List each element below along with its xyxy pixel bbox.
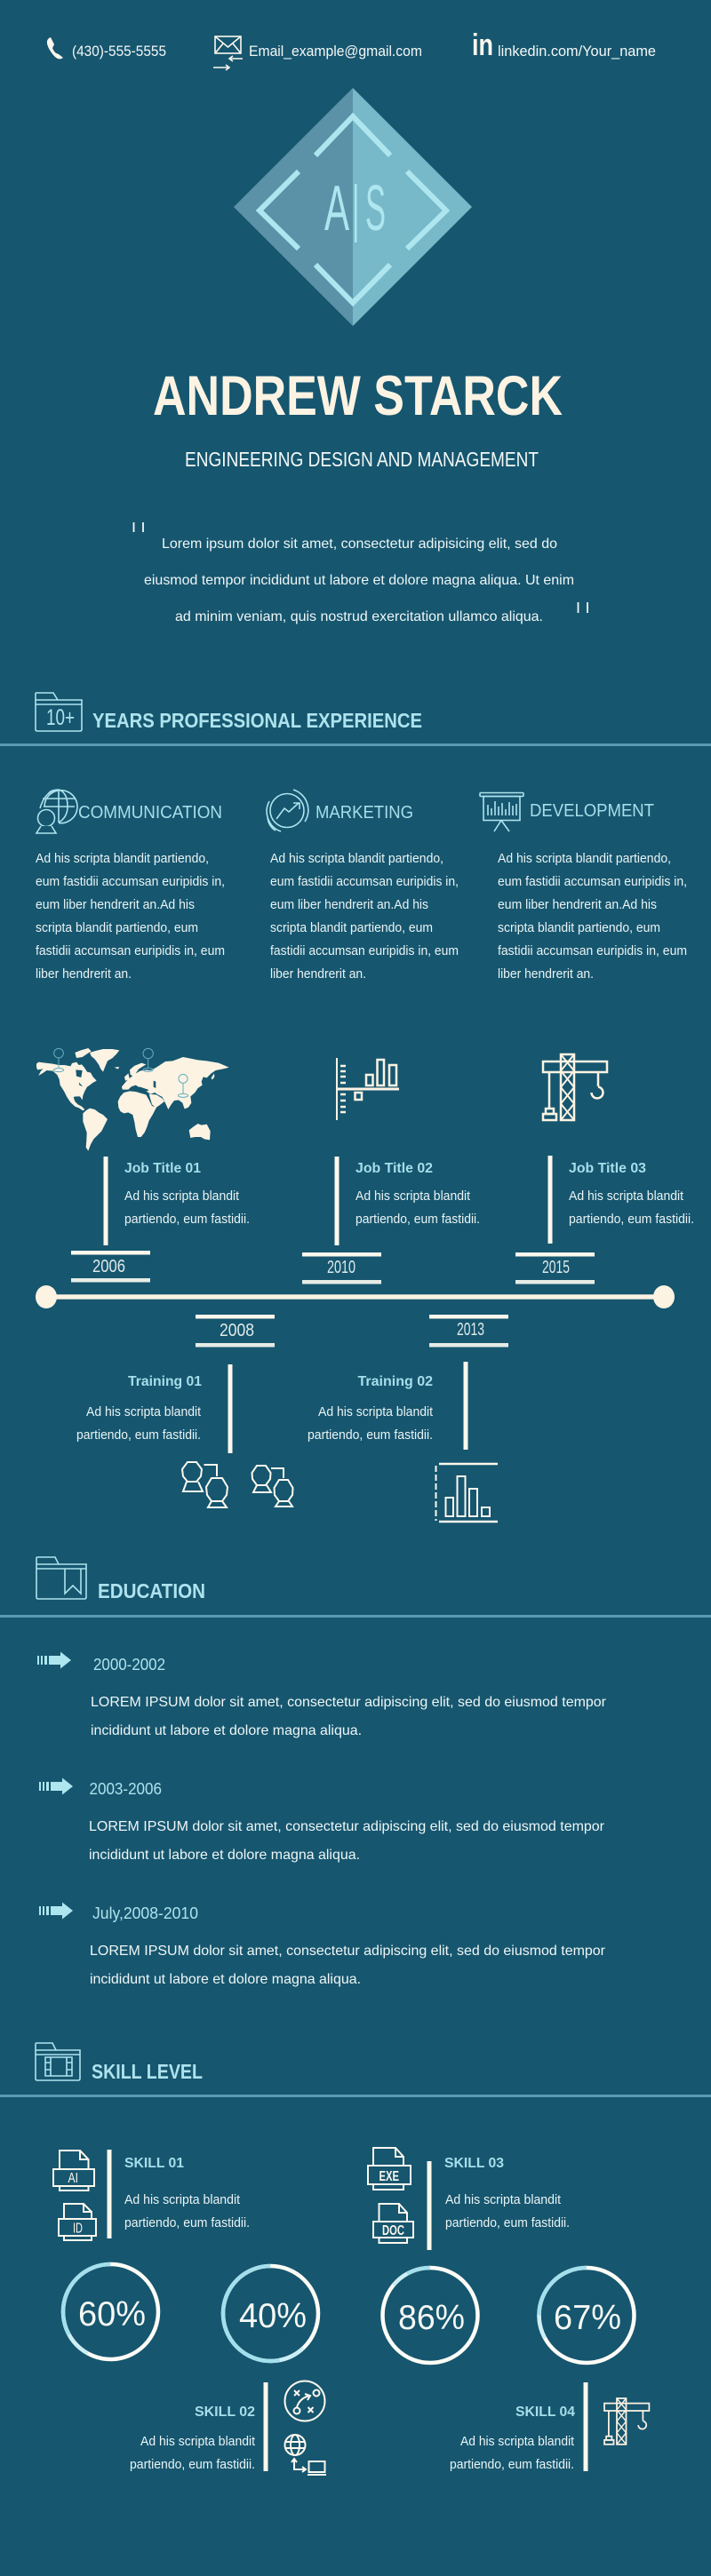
skill description	[130, 2434, 256, 2472]
description: scripta blandit partiendo, eum	[498, 920, 660, 935]
timeline year: 2013	[429, 1315, 508, 1347]
dates: July,2008-2010	[92, 1904, 198, 1922]
description: fastidii accumsan euripidis in, eum	[498, 943, 687, 958]
logo: diamond monogram: S	[365, 173, 386, 244]
progress ring: 40%	[223, 2266, 318, 2361]
skill description: Ad his scripta blandit	[124, 2192, 241, 2207]
icon: bookmark folder	[36, 1557, 86, 1599]
job description	[356, 1189, 480, 1227]
job description	[124, 1189, 250, 1227]
section heading: experience	[36, 693, 422, 732]
job title: Job Title 01	[124, 1161, 201, 1176]
training description	[76, 1404, 202, 1443]
description	[36, 851, 225, 982]
heading: MARKETING	[316, 803, 413, 823]
icon: opening quote	[133, 522, 143, 532]
logo: diamond monogram: A	[324, 173, 349, 244]
description: LOREM IPSUM dolor sit amet, consectetur adipiscing elit, sed do eiusmod tempor	[89, 1819, 605, 1834]
quote text: Lorem ipsum dolor sit amet, consectetur adipisicing elit, sed do	[162, 537, 557, 552]
panel: skill 03	[368, 2148, 570, 2250]
icon: ID file	[59, 2204, 96, 2240]
icon: DOC file	[373, 2204, 413, 2243]
icon: linkedin: in	[472, 28, 493, 62]
icon: folder 10+	[36, 693, 82, 731]
description: LOREM IPSUM dolor sit amet, consectetur adipiscing elit, sed do eiusmod tempor	[91, 1695, 607, 1710]
description: incididunt ut labore et dolore magna aliqua.	[91, 1723, 362, 1738]
description: eum fastidii accumsan euripidis in,	[270, 874, 459, 889]
skill description: Ad his scripta blandit	[460, 2434, 575, 2449]
heading: DEVELOPMENT	[530, 801, 654, 821]
icon: globe and person	[36, 790, 77, 833]
job title: Job Title 02	[356, 1161, 433, 1176]
skill description: partiendo, eum fastidii.	[445, 2215, 570, 2230]
job description: partiendo, eum fastidii.	[356, 1212, 480, 1227]
progress ring: 67%	[539, 2268, 635, 2363]
skill description	[124, 2192, 250, 2230]
timeline year: 2013: 2013	[457, 1320, 484, 1340]
description	[90, 1944, 606, 1987]
progress ring: 86%	[382, 2268, 478, 2363]
icon: laptop link	[292, 2459, 326, 2475]
icon: tactics circle	[284, 2381, 325, 2421]
skill description: Ad his scripta blandit	[140, 2434, 256, 2449]
panel: education entry 1	[37, 1652, 607, 1738]
icon: crane small	[604, 2398, 649, 2445]
timeline year: 2010: 2010	[327, 1258, 356, 1277]
quote text: eiusmod tempor incididunt ut labore et dolore magna aliqua. Ut enim	[144, 573, 574, 588]
icon: EXE file	[368, 2148, 411, 2190]
description: liber hendrerit an.	[36, 966, 132, 982]
section heading: education	[36, 1557, 205, 1602]
progress ring: 67%: 67%	[554, 2299, 621, 2337]
skill title: SKILL 02	[195, 2405, 255, 2420]
timeline year: 2015: 2015	[542, 1258, 570, 1277]
description: liber hendrerit an.	[498, 966, 594, 982]
panel: skill 04	[450, 2382, 649, 2472]
training title: Training 02	[357, 1374, 433, 1389]
icon: DOC file: DOC	[382, 2223, 404, 2238]
logo: diamond monogram	[234, 88, 472, 326]
timeline year: 2008	[196, 1315, 275, 1347]
icon: people pair two	[252, 1466, 293, 1507]
job description: partiendo, eum fastidii.	[124, 1212, 250, 1227]
description: incididunt ut labore et dolore magna aliqua.	[90, 1972, 361, 1987]
icon: arrow	[39, 1903, 73, 1919]
description	[270, 851, 459, 982]
description: fastidii accumsan euripidis in, eum	[270, 943, 459, 958]
timeline year: 2006	[71, 1251, 150, 1283]
icon: people pair one	[182, 1462, 228, 1507]
skill description	[445, 2192, 570, 2230]
skill title: SKILL 04	[515, 2405, 575, 2420]
panel: marketing	[267, 790, 459, 982]
job description: partiendo, eum fastidii.	[569, 1212, 694, 1227]
quote text: ad minim veniam, quis nostrud exercitation ullamco aliqua.	[175, 609, 543, 624]
job description: Ad his scripta blandit	[124, 1189, 240, 1204]
training description: Ad his scripta blandit	[86, 1404, 202, 1419]
dates: 2003-2006	[89, 1780, 162, 1798]
icon: email	[213, 36, 243, 70]
progress ring: 86%: 86%	[398, 2299, 465, 2337]
panel: communication	[36, 790, 225, 982]
icon: presentation board	[480, 792, 523, 831]
email address: Email_example@gmail.com	[249, 43, 422, 60]
job description	[569, 1189, 694, 1227]
panel: education entry 2	[39, 1778, 605, 1863]
skill title: SKILL 03	[444, 2156, 504, 2171]
icon: dashed bar chart	[435, 1464, 498, 1522]
icon: arrow	[39, 1778, 73, 1794]
skill description: partiendo, eum fastidii.	[130, 2457, 255, 2472]
quote text	[144, 537, 574, 624]
description: eum liber hendrerit an.Ad his	[498, 897, 657, 912]
description: scripta blandit partiendo, eum	[36, 920, 198, 935]
description	[91, 1695, 607, 1738]
description: scripta blandit partiendo, eum	[270, 920, 433, 935]
icon: bar chart	[337, 1058, 399, 1120]
panel: skill 01	[53, 2150, 250, 2240]
description: eum liber hendrerit an.Ad his	[270, 897, 428, 912]
skill description: partiendo, eum fastidii.	[450, 2457, 574, 2472]
job description: Ad his scripta blandit	[569, 1189, 684, 1204]
timeline axis	[36, 1285, 675, 1308]
description: incididunt ut labore et dolore magna aliqua.	[89, 1848, 360, 1863]
panel: job 01	[103, 1157, 250, 1245]
timeline year: 2006: 2006	[92, 1257, 125, 1276]
description: eum liber hendrerit an.Ad his	[36, 897, 195, 912]
timeline year: 2010	[302, 1252, 381, 1284]
heading text: EDUCATION	[98, 1579, 205, 1602]
description: Ad his scripta blandit partiendo,	[36, 851, 209, 866]
panel: education entry 3	[39, 1903, 606, 1987]
section heading: skill level	[36, 2043, 203, 2083]
panel: contact header	[47, 28, 656, 70]
panel: skill 02	[130, 2381, 326, 2475]
panel: training 01	[76, 1364, 233, 1453]
icon: crane	[543, 1054, 607, 1120]
description: Ad his scripta blandit partiendo,	[498, 851, 671, 866]
panel: development	[480, 792, 687, 982]
description	[89, 1819, 605, 1863]
icon: phone	[47, 37, 63, 59]
icon: globe	[284, 2435, 306, 2455]
description: Ad his scripta blandit partiendo,	[270, 851, 443, 866]
progress ring: 40%: 40%	[239, 2297, 307, 2335]
description: eum fastidii accumsan euripidis in,	[498, 874, 687, 889]
dates: 2000-2002	[93, 1656, 165, 1674]
description: liber hendrerit an.	[270, 966, 366, 982]
progress ring: 60%: 60%	[78, 2295, 146, 2334]
skill description: Ad his scripta blandit	[445, 2192, 562, 2207]
phone number: (430)-555-5555	[72, 43, 166, 60]
icon: film folder	[36, 2043, 80, 2080]
skill description	[450, 2434, 575, 2472]
heading text: SKILL LEVEL	[92, 2060, 203, 2083]
job title: Job Title 03	[569, 1161, 646, 1176]
icon: arrow	[37, 1652, 71, 1668]
training description: partiendo, eum fastidii.	[308, 1427, 433, 1443]
icon: folder 10+: 10+	[46, 705, 75, 730]
training description	[308, 1404, 434, 1443]
linkedin address: linkedin.com/Your_name	[498, 43, 656, 60]
job description: Ad his scripta blandit	[356, 1189, 471, 1204]
quote block	[133, 522, 587, 624]
title: name: ANDREW STARCK	[153, 365, 563, 427]
heading text: YEARS PROFESSIONAL EXPERIENCE	[92, 709, 422, 732]
description: eum fastidii accumsan euripidis in,	[36, 874, 225, 889]
progress ring: 60%	[63, 2264, 158, 2359]
timeline year: 2015	[515, 1252, 595, 1284]
description	[498, 851, 687, 982]
training description: Ad his scripta blandit	[318, 1404, 434, 1419]
timeline year: 2008: 2008	[220, 1321, 254, 1340]
panel: job 02	[334, 1157, 480, 1245]
description: LOREM IPSUM dolor sit amet, consectetur adipiscing elit, sed do eiusmod tempor	[90, 1944, 606, 1959]
skill description: partiendo, eum fastidii.	[124, 2215, 250, 2230]
training description: partiendo, eum fastidii.	[76, 1427, 201, 1443]
panel: job 03	[547, 1156, 694, 1244]
skill title: SKILL 01	[124, 2156, 184, 2171]
icon: closing quote	[578, 602, 587, 613]
icon: AI file	[53, 2151, 94, 2190]
icon: ID file: ID	[73, 2221, 83, 2237]
description: fastidii accumsan euripidis in, eum	[36, 943, 225, 958]
icon: growth arrow circle	[267, 790, 308, 831]
training title: Training 01	[128, 1374, 202, 1389]
icon: AI file: AI	[68, 2171, 78, 2186]
icon: EXE file: EXE	[379, 2169, 399, 2184]
subtitle: ENGINEERING DESIGN AND MANAGEMENT	[185, 448, 539, 471]
heading: COMMUNICATION	[78, 803, 222, 823]
icon: world map with pins	[36, 1048, 229, 1151]
panel: training 02	[308, 1362, 467, 1450]
